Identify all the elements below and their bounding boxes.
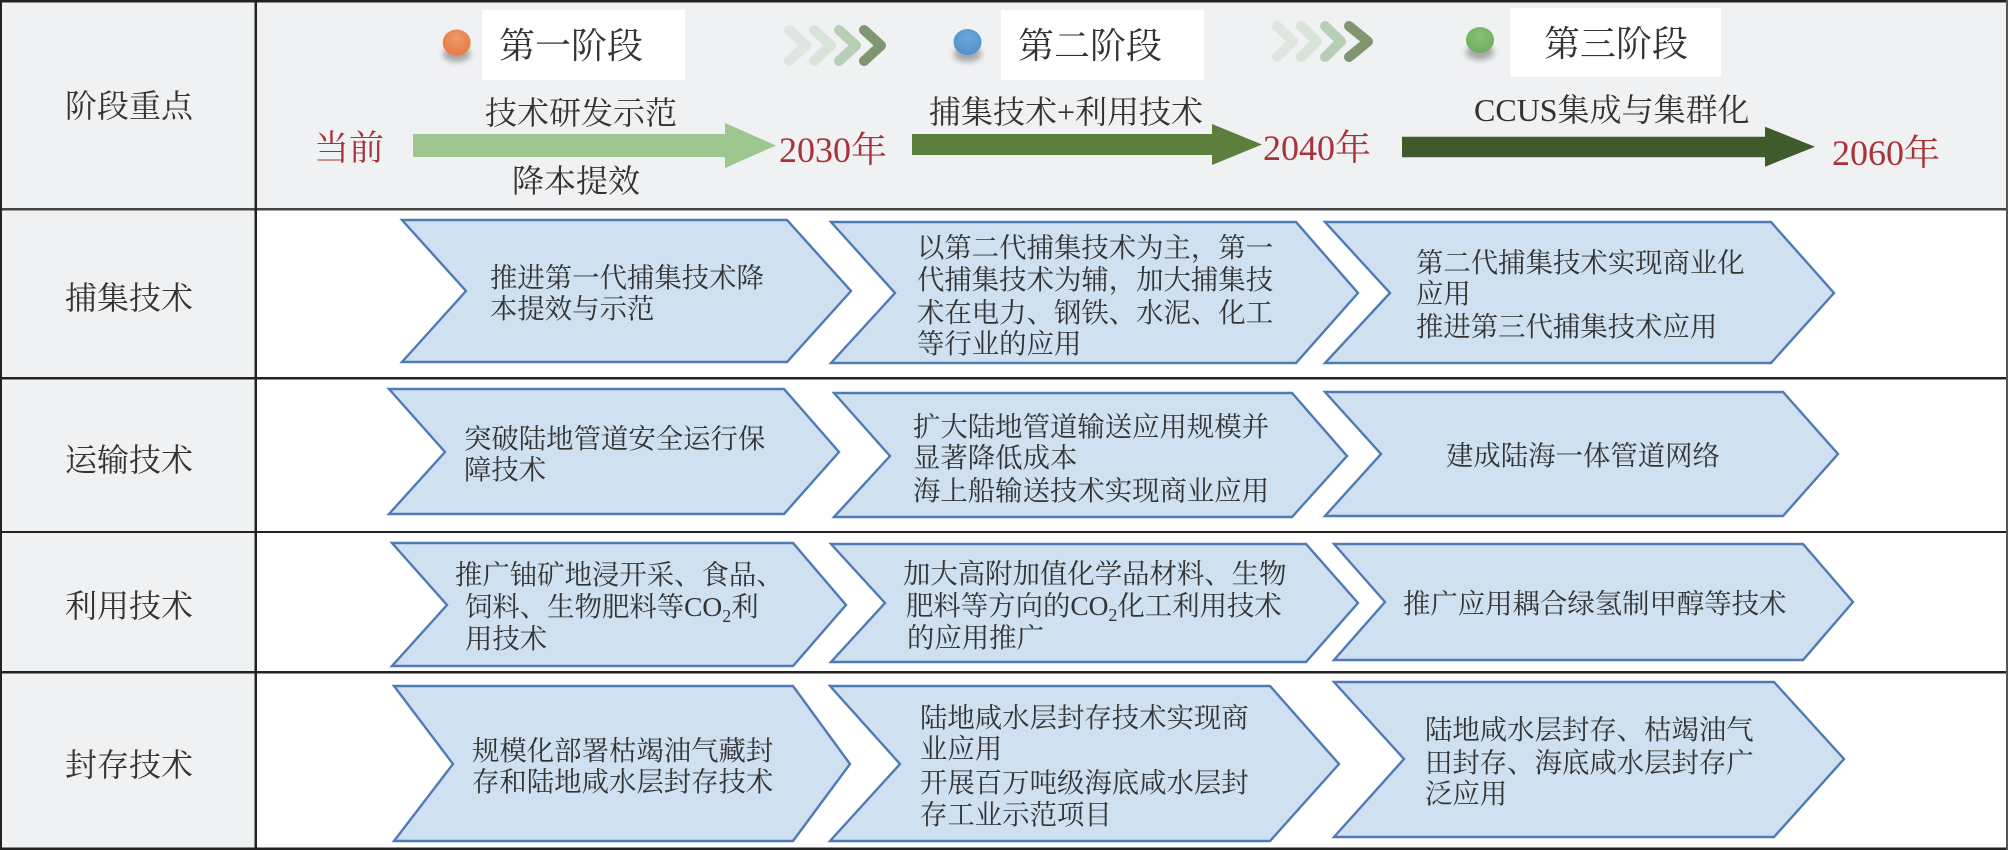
chevron: capture stage one: 推进第一代捕集技术降 xyxy=(490,263,764,293)
chevron: storage stage three: 泛应用 xyxy=(1425,779,1507,809)
chevron: transport stage two: 显著降低成本 xyxy=(913,443,1077,473)
chevron: transport stage two: 海上船输送技术实现商业应用 xyxy=(913,476,1269,506)
chevron: storage stage two: 存工业示范项目 xyxy=(920,800,1112,830)
label: 2030: 2030年 xyxy=(779,130,887,170)
chevron: utilization stage one: 饲料、生物肥料等CO xyxy=(465,592,722,622)
panel: transport technology row xyxy=(65,389,1838,517)
chevron: storage stage one: 存和陆地咸水层封存技术 xyxy=(472,767,773,797)
chevron: storage stage one xyxy=(394,686,850,841)
chevron: storage stage three: 陆地咸水层封存、枯竭油气 xyxy=(1425,715,1754,745)
chevron: capture stage two: 以第二代捕集技术为主，第一 xyxy=(917,233,1273,263)
chevron: transport stage one xyxy=(389,389,839,514)
chevron: utilization stage two: 的应用推广 xyxy=(907,623,1044,653)
heading: stage three xyxy=(1510,8,1721,77)
row label: transport technology: 运输技术 xyxy=(65,442,193,478)
label: 2040: 2040年 xyxy=(1263,128,1371,168)
label: current: 当前 xyxy=(314,129,384,168)
chevron: capture stage three xyxy=(1325,222,1834,363)
icon: orange stage dot xyxy=(443,30,471,62)
text: cost reduction and efficiency: 降本提效 xyxy=(512,163,640,199)
text: capture plus utilization: 捕集技术+利用技术 xyxy=(929,94,1203,130)
chevron: transport stage three: 建成陆海一体管道网络 xyxy=(1446,441,1720,471)
heading: stage two: 第二阶段 xyxy=(1018,26,1162,66)
chevron: utilization stage two: 肥料等方向的CO xyxy=(906,591,1108,621)
chevron: storage stage two: 业应用 xyxy=(920,734,1002,764)
chevron: transport stage three xyxy=(1325,392,1838,516)
icon: blue stage dot xyxy=(954,29,982,62)
chevron: capture stage two: 术在电力、钢铁、水泥、化工 xyxy=(917,298,1273,328)
chevron: capture stage three: 应用 xyxy=(1416,279,1471,309)
chevron: utilization stage two xyxy=(831,544,1358,662)
panel: utilization technology row xyxy=(65,543,1853,666)
chevron: capture stage three: 第二代捕集技术实现商业化 xyxy=(1416,248,1745,278)
chevron: utilization stage one xyxy=(392,543,846,666)
icon: green stage dot xyxy=(1466,27,1494,60)
arrow: to 2040 xyxy=(912,124,1262,165)
panel: capture technology row xyxy=(65,220,1834,363)
panel: storage technology row xyxy=(65,682,1844,841)
chevron: capture stage one: 本提效与示范 xyxy=(490,294,654,324)
chevron: storage stage one: 规模化部署枯竭油气藏封 xyxy=(472,736,773,766)
icon: chevrons from stage two to stage three xyxy=(1277,26,1368,57)
chevron: utilization stage three xyxy=(1334,544,1853,660)
row label: stage focus: 阶段重点 xyxy=(65,88,194,124)
heading: stage two xyxy=(1001,10,1204,80)
chevron: utilization stage two: 化工利用技术 xyxy=(1117,591,1282,621)
chevron: storage stage three xyxy=(1334,682,1844,837)
arrow: to 2060 xyxy=(1402,127,1815,167)
chevron: storage stage two: 开展百万吨级海底咸水层封 xyxy=(920,768,1249,798)
chevron: utilization stage three: 推广应用耦合绿氢制甲醇等技术 xyxy=(1403,589,1786,619)
chevron: capture stage two: 等行业的应用 xyxy=(917,329,1081,359)
chevron: transport stage two xyxy=(834,393,1347,517)
panel: stage focus header row xyxy=(65,8,1940,199)
chevron: capture stage one xyxy=(402,220,851,362)
chevron: transport stage one: 障技术 xyxy=(464,455,546,485)
chevron: utilization stage one: 用技术 xyxy=(465,624,547,654)
chevron: utilization stage two: 2 xyxy=(1108,605,1117,625)
chevron: capture stage three: 推进第三代捕集技术应用 xyxy=(1416,312,1717,342)
heading: stage one xyxy=(482,10,685,80)
chevron: storage stage three: 田封存、海底咸水层封存广 xyxy=(1425,748,1754,778)
arrow: to 2030 xyxy=(413,123,776,168)
chevron: utilization stage one: 2 xyxy=(722,606,731,626)
heading: stage three: 第三阶段 xyxy=(1544,24,1688,64)
chevron: transport stage one: 突破陆地管道安全运行保 xyxy=(464,424,765,454)
label: 2060: 2060年 xyxy=(1832,133,1940,173)
chevron: capture stage two xyxy=(831,222,1358,363)
row label: utilization technology: 利用技术 xyxy=(65,588,193,624)
icon: chevrons from stage one to stage two xyxy=(789,30,881,61)
chevron: storage stage two xyxy=(830,686,1339,841)
row label: capture technology: 捕集技术 xyxy=(65,280,193,316)
text: CCUS integration and clustering: CCUS集成与集群化 xyxy=(1474,92,1750,128)
chevron: capture stage two: 代捕集技术为辅，加大捕集技 xyxy=(917,265,1273,295)
text: technology R&D demonstration: 技术研发示范 xyxy=(485,95,677,131)
heading: stage one: 第一阶段 xyxy=(499,26,643,66)
chevron: utilization stage one: 利 xyxy=(731,592,759,622)
chevron: storage stage two: 陆地咸水层封存技术实现商 xyxy=(920,703,1249,733)
chevron: transport stage two: 扩大陆地管道输送应用规模并 xyxy=(913,412,1269,442)
chevron: utilization stage one: 推广铀矿地浸开采、食品、 xyxy=(455,560,784,590)
chevron: utilization stage two: 加大高附加值化学品材料、生物 xyxy=(903,559,1286,589)
row label: storage technology: 封存技术 xyxy=(65,747,193,783)
